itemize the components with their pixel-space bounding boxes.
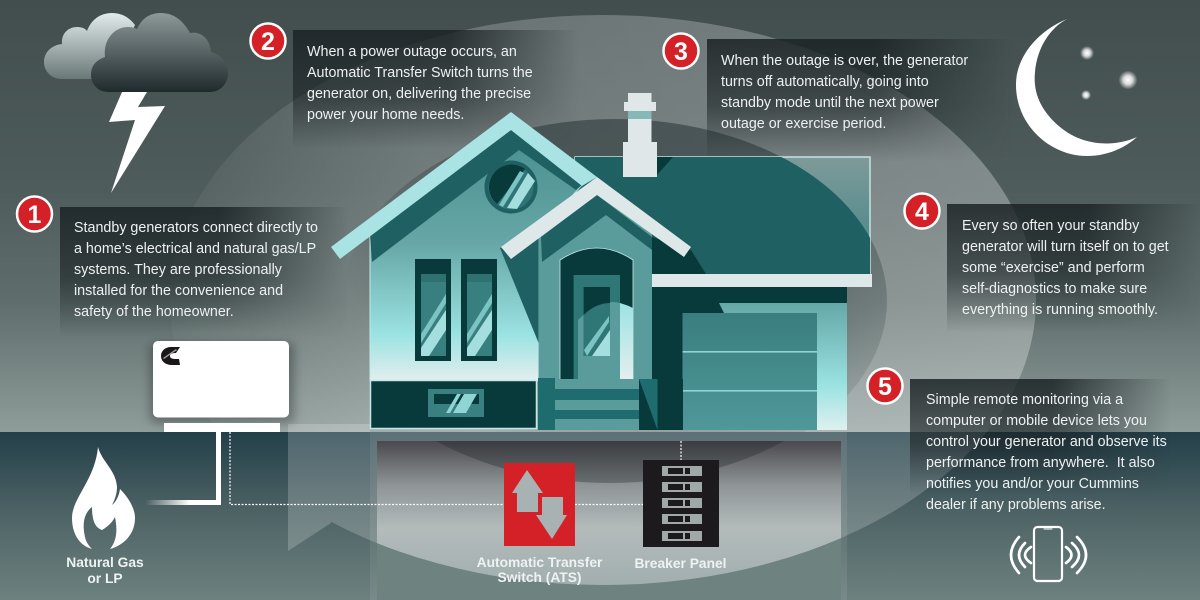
label: natural gas: Natural Gas — [66, 555, 144, 570]
foundation — [370, 380, 536, 428]
text block 5: control your generator and observe its — [926, 434, 1167, 450]
label: breaker panel: Breaker Panel — [634, 556, 727, 571]
icon: storm cloud — [44, 13, 228, 92]
panel 1 background — [60, 207, 334, 328]
text block 4: everything is running smoothly. — [962, 302, 1158, 318]
window left — [415, 259, 451, 361]
badge 1 — [17, 196, 52, 232]
window right — [461, 259, 497, 361]
badge 5 — [868, 368, 902, 404]
text block 4: some “exercise” and perform — [962, 260, 1145, 276]
panel 2 background — [293, 30, 564, 140]
badge 4: 4 — [915, 198, 929, 226]
badge 1: 1 — [28, 201, 42, 229]
text block 4: self-diagnostics to make sure — [962, 281, 1147, 297]
text block 5: notifies you and/or your Cummins — [926, 476, 1139, 492]
icon: flame — [72, 447, 135, 549]
icon: breaker panel — [643, 460, 719, 547]
text block 5: performance from anywhere. It also — [926, 455, 1155, 471]
large light ellipse above ground — [198, 15, 1036, 432]
text block 2: When a power outage occurs, an — [307, 44, 517, 60]
dotted control line — [230, 432, 681, 504]
text block 3: When the outage is over, the generator — [721, 53, 968, 69]
basement frame — [370, 432, 847, 600]
generator shadow — [150, 343, 294, 423]
icon: Cummins logo — [161, 347, 180, 365]
basement panel base — [377, 441, 841, 600]
badge 2 — [250, 24, 286, 58]
text block 1: systems. They are professionally — [74, 262, 283, 278]
badge 4 — [904, 194, 940, 228]
background ground — [0, 432, 1200, 600]
chimney — [623, 93, 657, 177]
main roof — [575, 157, 870, 274]
porch wall — [539, 190, 652, 380]
text block 2: generator on, delivering the precise — [307, 86, 531, 102]
basement light — [377, 441, 841, 600]
wall shadow under porch roof — [500, 225, 539, 343]
badge 2: 2 — [261, 28, 275, 56]
bookmark shape behind basement — [288, 424, 370, 551]
panel 3 background — [707, 39, 986, 154]
badge 5: 5 — [878, 373, 892, 401]
stars — [1080, 46, 1138, 100]
label: ATS: Automatic Transfer — [477, 555, 603, 570]
gas pipe horizontal — [145, 500, 221, 505]
house illustration — [331, 93, 872, 430]
generator — [153, 341, 289, 432]
panel 5 background — [910, 379, 1160, 486]
text block 3: outage or exercise period. — [721, 116, 886, 132]
panel 4 background — [947, 204, 1183, 326]
text block 1: safety of the homeowner. — [74, 304, 234, 320]
icon: lightning bolt — [109, 92, 165, 193]
icon: ATS — [504, 463, 575, 546]
icon: crescent moon — [1016, 19, 1137, 156]
text block 5: computer or mobile device lets you — [926, 413, 1147, 429]
background sky — [0, 0, 1200, 432]
label: natural gas: or LP — [87, 571, 123, 586]
badge 3: 3 — [674, 38, 688, 66]
main gable roof band — [331, 112, 597, 259]
basement dark lens — [436, 441, 784, 483]
text block 1: a home’s electrical and natural gas/LP — [74, 241, 316, 257]
garage section — [652, 237, 872, 430]
gas pipe vertical — [216, 432, 221, 505]
front gable roof band — [501, 177, 691, 259]
inner dark ellipse — [368, 119, 887, 432]
text block 4: generator will turn itself on to get — [962, 239, 1169, 255]
text block 2: power your home needs. — [307, 107, 464, 123]
text block 4: Every so often your standby — [962, 218, 1140, 234]
badge 3 — [664, 34, 698, 68]
text block 5: Simple remote monitoring via a — [926, 392, 1123, 408]
text block 1: Standby generators connect directly to — [74, 220, 318, 236]
front door — [560, 248, 633, 380]
front steps — [538, 378, 683, 430]
label: ATS: Switch (ATS) — [497, 570, 582, 585]
text block 3: standby mode until the next power — [721, 95, 939, 111]
large light ellipse below ground — [331, 432, 986, 543]
text block 1: installed for the convenience and — [74, 283, 283, 299]
text block 3: turns off automatically, going into — [721, 74, 929, 90]
text block 5: dealer if any problems arise. — [926, 497, 1106, 513]
text block 2: Automatic Transfer Switch turns the — [307, 65, 533, 81]
gable shadow — [370, 130, 582, 262]
left wall — [370, 130, 582, 381]
icon: phone with signal — [1011, 527, 1086, 581]
round window — [486, 162, 536, 212]
